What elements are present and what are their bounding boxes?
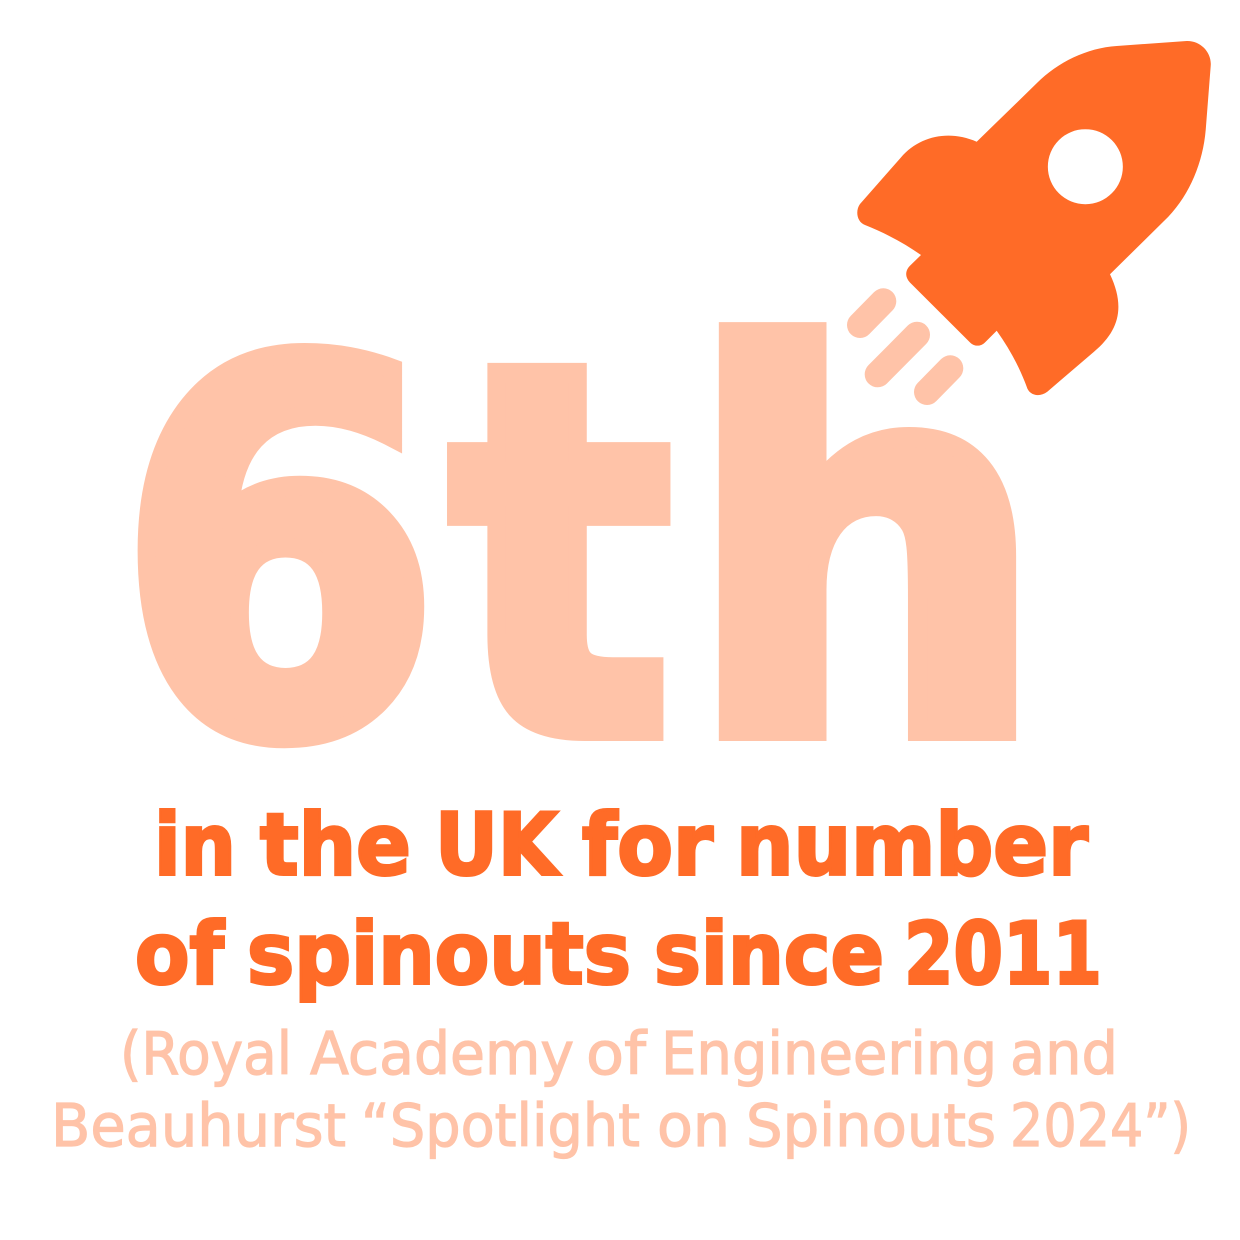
headline line 1: in: [154, 796, 236, 896]
big number: 6th: t: [450, 259, 672, 852]
citation line 2: on: [657, 1091, 730, 1160]
headline line 2: spinouts: [247, 904, 631, 1004]
citation line 2: Spinouts: [746, 1091, 996, 1160]
headline line 2: 2011: [904, 904, 1102, 1004]
big number: 6th: 6: [118, 259, 440, 852]
citation line 2: 2024”): [1010, 1091, 1191, 1160]
headline line 1: for: [582, 796, 714, 896]
headline line 2: of: [135, 904, 225, 1004]
headline line 1: number: [736, 796, 1089, 896]
citation line 1: Engineering: [661, 1019, 997, 1088]
headline line 1: UK: [435, 796, 561, 896]
citation line 1: Academy: [310, 1019, 574, 1088]
headline line 2: since: [654, 904, 884, 1004]
citation line 1: (Royal: [120, 1019, 292, 1088]
citation line 2: “Spotlight: [361, 1091, 640, 1160]
citation line 1: of: [586, 1019, 647, 1088]
headline line 1: the: [260, 796, 411, 896]
rocket exhaust lines: [860, 301, 950, 392]
icon: rocket: [857, 41, 1211, 395]
source citation: [51, 1019, 1191, 1160]
rocket body: [857, 41, 1211, 395]
headline: [135, 796, 1102, 1004]
citation line 2: Beauhurst: [51, 1091, 346, 1160]
citation line 1: and: [1010, 1019, 1118, 1088]
big number: 6th: h: [686, 244, 1046, 855]
